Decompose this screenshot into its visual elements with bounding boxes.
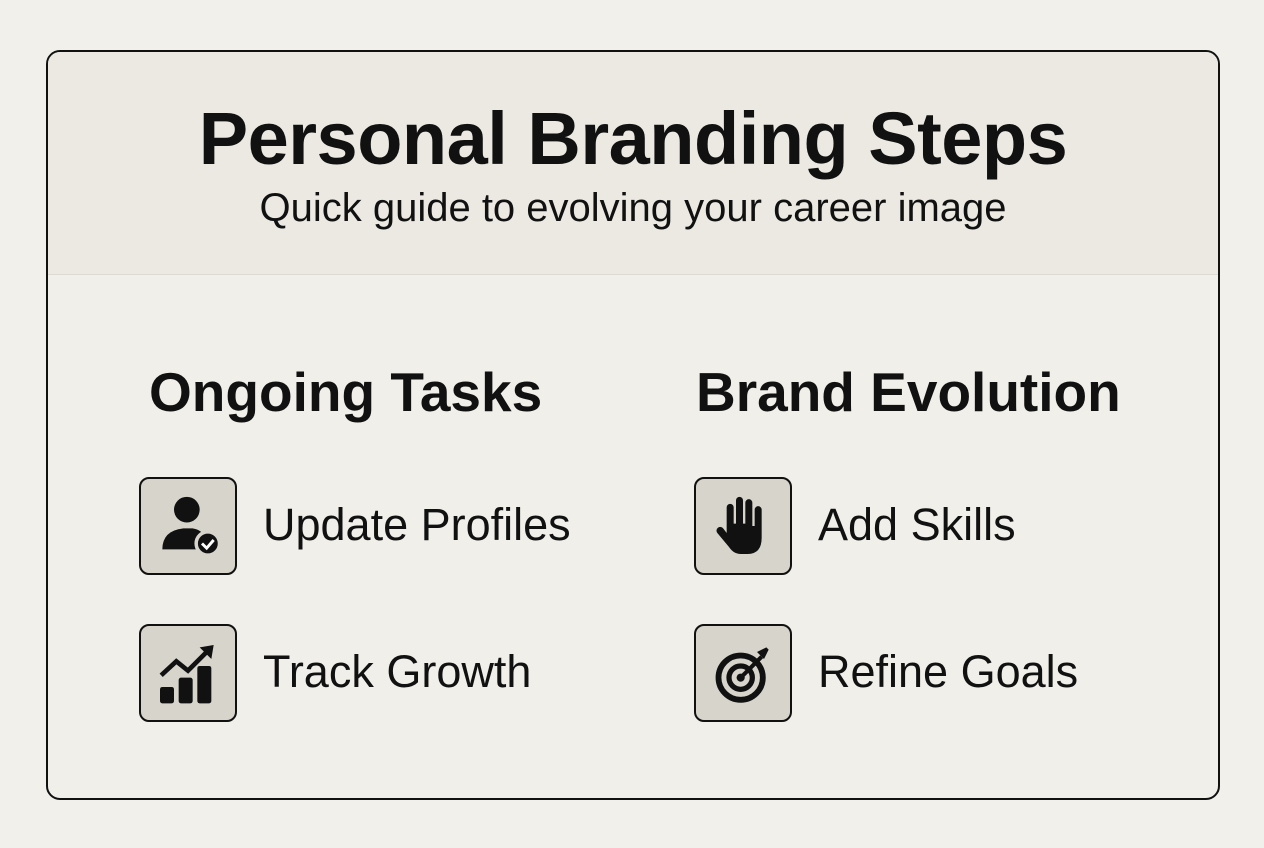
header band (48, 52, 1218, 275)
item: Refine Goals (694, 624, 1078, 722)
item: Track Growth: Track Growth (263, 646, 531, 697)
item: Update Profiles: Update Profiles (263, 499, 571, 550)
item: Track Growth (139, 624, 531, 722)
title: Personal Branding Steps (199, 97, 1067, 180)
item: Refine Goals: Refine Goals (818, 646, 1078, 697)
icon: user check (139, 477, 237, 575)
item: Update Profiles (139, 477, 571, 575)
item: Add Skills (694, 477, 1016, 575)
heading: Brand Evolution: Brand Evolution (696, 361, 1121, 423)
icon: growth chart (139, 624, 237, 722)
icon: target (694, 624, 792, 722)
item: Add Skills: Add Skills (818, 499, 1016, 550)
subtitle: Quick guide to evolving your career image (259, 186, 1007, 230)
heading: Ongoing Tasks: Ongoing Tasks (149, 361, 542, 423)
icon: hand (694, 477, 792, 575)
